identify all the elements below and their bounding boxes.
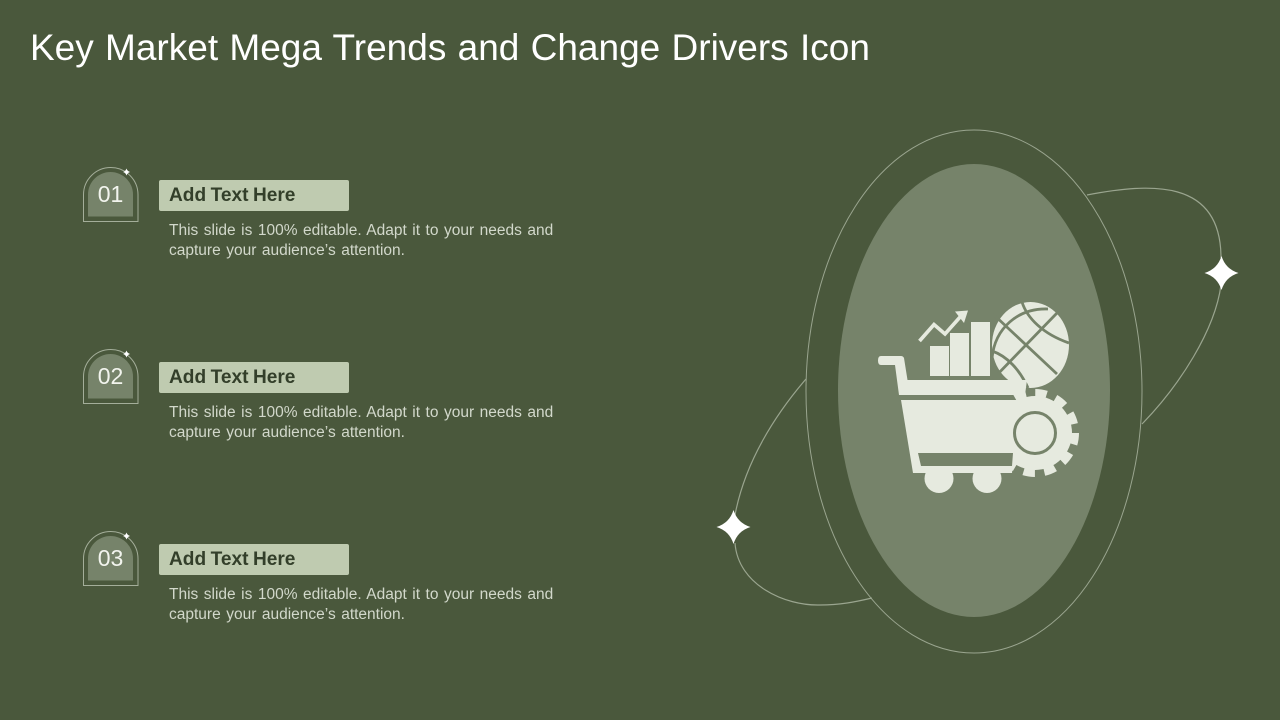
- icon: bar chart with arrow: [920, 310, 990, 376]
- description 03: capture your audience’s attention.: [169, 606, 405, 623]
- icon: shopping cart: [878, 356, 1027, 493]
- description 01: [169, 222, 553, 259]
- star bottom left: [716, 510, 750, 544]
- description 02: This slide is 100% editable. Adapt it to your needs and: [169, 404, 553, 421]
- heading bar 01: [159, 180, 349, 211]
- heading bar 02: [159, 362, 349, 393]
- icon: globe: [992, 302, 1069, 388]
- description 03: This slide is 100% editable. Adapt it to your needs and: [169, 586, 553, 603]
- number badge 01: [83, 167, 138, 222]
- description 03: [169, 586, 553, 623]
- number 02: 02: [98, 363, 123, 389]
- inner ellipse: [838, 164, 1110, 617]
- item 02: [83, 349, 553, 441]
- number 01: 01: [98, 181, 123, 207]
- item 03: [83, 531, 553, 623]
- orbit line top right: [1087, 188, 1221, 424]
- description 01: This slide is 100% editable. Adapt it to your needs and: [169, 222, 553, 239]
- outer ellipse: [806, 130, 1142, 653]
- description 01: capture your audience’s attention.: [169, 242, 405, 259]
- number 03: 03: [98, 545, 123, 571]
- item 01: [83, 167, 553, 259]
- heading bar 02: Add Text Here: [169, 367, 295, 388]
- description 02: [169, 404, 553, 441]
- number badge 03: [83, 531, 138, 586]
- heading bar 03: [159, 544, 349, 575]
- illustration: orbit and market icon: [716, 130, 1238, 654]
- heading bar 03: Add Text Here: [169, 549, 295, 570]
- description 02: capture your audience’s attention.: [169, 424, 405, 441]
- heading bar 01: Add Text Here: [169, 185, 295, 206]
- orbit line bottom left: [735, 379, 872, 605]
- title: Key Market Mega Trends and Change Drivers Icon: [30, 27, 870, 68]
- number badge 02: [83, 349, 138, 404]
- icon: gear: [995, 393, 1075, 473]
- star top right: [1204, 256, 1238, 290]
- icon: gear hub: [1014, 412, 1056, 454]
